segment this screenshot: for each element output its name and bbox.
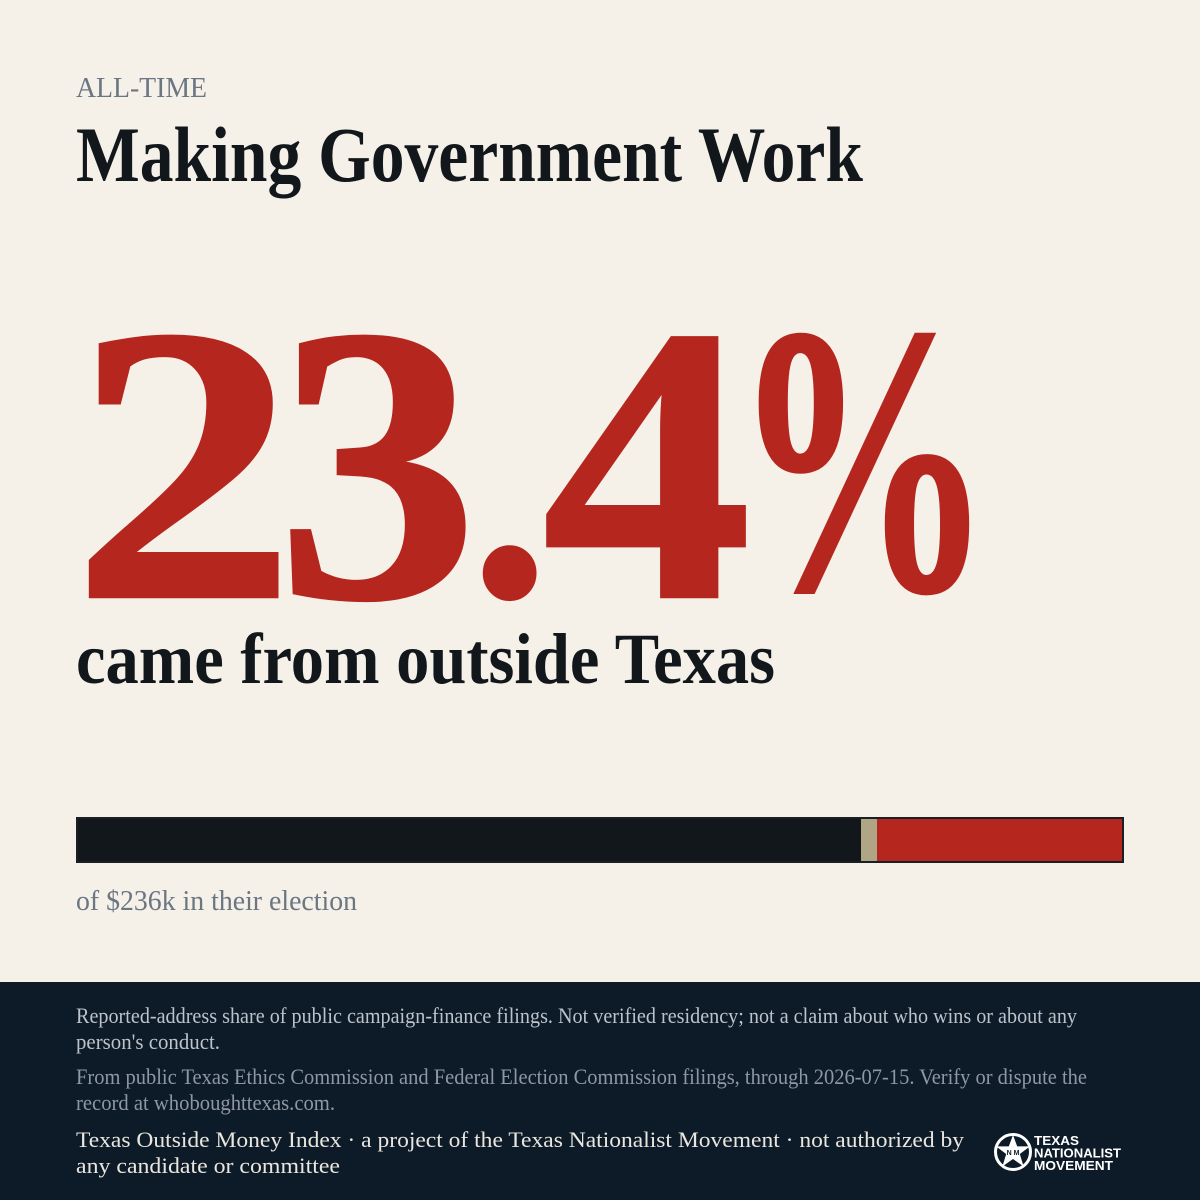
footer disclaimer: Reported-address share of public campaign-finance filings. Not verified residency; not a claim about who wins or about any xyxy=(76,1003,1077,1028)
icon: star in circle: N M xyxy=(1007,1150,1020,1157)
title: Making Government Work xyxy=(76,111,864,198)
footer attribution: any candidate or committee xyxy=(76,1153,340,1178)
footer source note: record at whoboughttexas.com. xyxy=(76,1090,335,1115)
logo wordmark xyxy=(1034,1133,1121,1173)
stacked bar xyxy=(77,818,1123,862)
logo: Texas Nationalist Movement xyxy=(996,1133,1121,1173)
footer attribution: Texas Outside Money Index · a project of the Texas Nationalist Movement · not authorized by xyxy=(76,1127,964,1152)
bar segment: outside Texas xyxy=(877,819,1122,861)
big statistic: 2 xyxy=(72,247,296,683)
eyebrow label: ALL-TIME xyxy=(76,72,207,104)
bar caption: of $236k in their election xyxy=(76,885,357,917)
bar segment: unknown share xyxy=(861,819,877,861)
logo wordmark: NATIONALIST xyxy=(1034,1146,1121,1160)
big statistic: . xyxy=(470,302,549,667)
footer panel xyxy=(0,982,1200,1200)
big statistic xyxy=(72,247,993,683)
footer disclaimer: person's conduct. xyxy=(76,1029,220,1054)
footer attribution xyxy=(76,1127,964,1178)
logo wordmark: MOVEMENT xyxy=(1034,1158,1113,1173)
big statistic: 3 xyxy=(277,247,478,683)
subheading: came from outside Texas xyxy=(76,619,775,699)
footer source note xyxy=(76,1064,1087,1115)
big statistic: 4 xyxy=(542,247,752,683)
footer disclaimer xyxy=(76,1003,1077,1054)
big statistic: % xyxy=(733,249,993,673)
logo wordmark: TEXAS xyxy=(1034,1133,1079,1148)
footer source note: From public Texas Ethics Commission and Federal Election Commission filings, through 2026-07-15. Verify or dispute the xyxy=(76,1064,1087,1089)
